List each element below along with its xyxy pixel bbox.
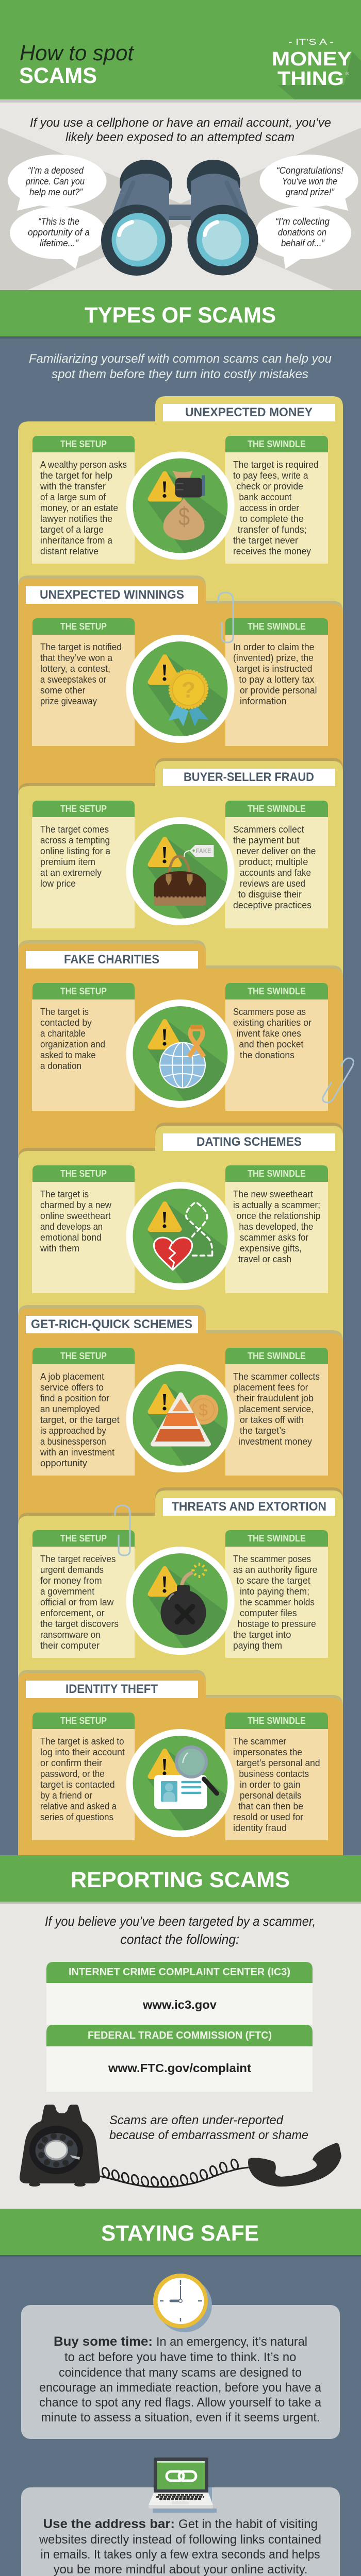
setup card: money, or an estate	[40, 503, 118, 513]
swindle card: placement fees for	[233, 1382, 308, 1393]
label: GET-RICH-QUICK SCHEMES	[31, 1317, 192, 1331]
types intro text: spot them before they turn into costly mistakes	[52, 367, 308, 381]
label: THREATS AND EXTORTION	[172, 1500, 326, 1514]
swindle card: Scammers collect	[233, 824, 304, 835]
setup card	[32, 801, 135, 928]
swindle card	[225, 801, 328, 928]
intro text: likely been exposed to an attempted scam	[65, 130, 294, 144]
swindle card: THE SWINDLE	[248, 1351, 306, 1361]
setup card	[32, 436, 135, 564]
setup card: THE SETUP	[60, 1716, 107, 1726]
reporting intro text: contact the following:	[121, 1931, 239, 1947]
swindle card: THE SWINDLE	[248, 1168, 306, 1179]
swindle card: In order to claim the	[233, 642, 315, 652]
swindle card: the scammer holds	[240, 1597, 315, 1607]
swindle card: (invented) prize, the	[233, 653, 314, 663]
swindle card	[225, 436, 328, 564]
setup card: with an investment	[40, 1447, 114, 1458]
swindle card	[225, 1348, 328, 1476]
heading banner: reporting scams	[0, 1855, 361, 1904]
setup card: opportunity	[40, 1458, 87, 1468]
icon: warning sign and fake handbag: FAKE	[196, 847, 211, 855]
setup card: relative and asked a	[40, 1801, 117, 1811]
setup card: or confirm their	[40, 1758, 102, 1768]
staying safe panel background	[0, 2255, 361, 2576]
icon: rotary phone	[20, 2105, 100, 2187]
logo: it's a money thing: MONEY	[272, 48, 352, 70]
setup card: across a tempting	[40, 835, 110, 845]
swindle card: the target into	[233, 1630, 291, 1640]
tip card: use the address bar	[21, 2458, 340, 2576]
label	[163, 404, 335, 421]
swindle card: information	[240, 696, 287, 706]
swindle card: is actually a scammer;	[233, 1200, 320, 1210]
setup card: an unemployed	[40, 1404, 100, 1414]
swindle card: travel or cash	[238, 1254, 291, 1264]
setup card: THE SETUP	[60, 986, 107, 996]
setup card: inheritance from a	[40, 535, 113, 546]
setup card: lawyer notifies the	[40, 514, 112, 524]
swindle card: access in order	[240, 503, 299, 513]
speech bubble: congratulations	[260, 155, 358, 211]
swindle card: placement service,	[239, 1404, 314, 1414]
label: UNEXPECTED MONEY	[185, 405, 313, 419]
setup card: log into their account	[40, 1747, 125, 1757]
speech bubble: donations: donations on	[278, 227, 326, 238]
swindle card: to pay a lottery tax	[239, 674, 314, 685]
setup card: the target for help	[40, 470, 112, 481]
logo: it's a money thing: - IT’S A -	[288, 37, 334, 47]
tip card: buy some time: coincidence that many scams are designed to	[59, 2366, 302, 2380]
swindle card: hostage to pressure	[238, 1619, 316, 1629]
swindle card: that can then be	[238, 1801, 303, 1811]
icon: warning sign and bomb	[126, 1547, 234, 1655]
contact card: FTC: FEDERAL TRADE COMMISSION (FTC)	[88, 2030, 272, 2041]
setup card: password, or the	[40, 1769, 105, 1779]
swindle card	[225, 618, 328, 746]
swindle card: bank account	[239, 492, 291, 502]
intro text: If you use a cellphone or have an email account, you’ve	[30, 116, 331, 130]
setup card	[32, 1165, 135, 1293]
swindle card: The target is required	[233, 460, 319, 470]
setup card: The target is notified	[40, 642, 122, 652]
setup card: series of questions	[40, 1812, 113, 1822]
label	[163, 769, 335, 786]
icon: clock	[153, 2274, 212, 2332]
setup card: THE SETUP	[60, 439, 107, 449]
paperclip 1	[218, 592, 233, 642]
swindle card: business contacts	[239, 1769, 309, 1779]
tip card: use the address bar: Get in the habit of visiting	[178, 2517, 318, 2531]
speech bubble: opportunity: “This is the	[38, 216, 79, 227]
tip card: buy some time: to act before you have time to think. It’s no	[64, 2350, 296, 2364]
setup card: of a large sum of	[40, 492, 106, 502]
label: IDENTITY THEFT	[65, 1682, 158, 1696]
setup card: asked to make	[40, 1050, 96, 1060]
setup card	[32, 983, 135, 1111]
icon: warning sign and fake handbag	[126, 817, 234, 925]
setup card: a government	[40, 1586, 94, 1597]
swindle card: THE SWINDLE	[248, 804, 306, 814]
setup card: and develops an	[40, 1222, 103, 1232]
swindle card: transfer of funds;	[238, 524, 307, 535]
label	[26, 1681, 198, 1698]
setup card: with the transfer	[40, 481, 106, 492]
folder: dating schemes	[18, 1123, 343, 1342]
setup card: The target is asked to	[40, 1736, 124, 1747]
swindle card: THE SWINDLE	[248, 986, 306, 996]
setup card: at an extremely	[40, 868, 102, 878]
speech bubble: deposed prince: help me out?”	[29, 187, 83, 197]
tip card: use the address bar: websites directly instead of following links contained	[39, 2533, 321, 2547]
speech bubble: deposed prince	[8, 155, 106, 211]
swindle card: THE SWINDLE	[248, 621, 306, 632]
setup card: emotional bond	[40, 1232, 102, 1243]
intro panel with binoculars	[0, 116, 361, 290]
setup card: THE SETUP	[60, 621, 107, 632]
setup card	[32, 1530, 135, 1658]
swindle card: target is instructed	[236, 664, 313, 674]
tip card: use the address bar: Use the address bar:	[43, 2517, 175, 2531]
setup card: enforcement, or	[40, 1608, 105, 1618]
swindle card	[225, 1713, 328, 1840]
tip card: use the address bar: in emails. It takes only a few extra seconds and helps	[41, 2548, 320, 2562]
setup card: a charitable	[40, 1028, 86, 1039]
setup card: The target receives	[40, 1554, 116, 1564]
setup card: THE SETUP	[60, 804, 107, 814]
swindle card: once the relationship	[236, 1211, 321, 1221]
label: DATING SCHEMES	[196, 1135, 302, 1149]
heading banner: types of scams: TYPES OF SCAMS	[85, 303, 276, 328]
setup card: charmed by a new	[40, 1200, 112, 1210]
folder: identity theft	[18, 1670, 343, 1855]
folder: fake charities	[18, 940, 343, 1160]
label: FAKE CHARITIES	[64, 953, 159, 967]
setup card: a donation	[40, 1061, 81, 1071]
setup card: ransomware on	[40, 1630, 100, 1640]
swindle card	[225, 1530, 328, 1658]
swindle card: the target’s	[240, 1426, 286, 1436]
setup card	[32, 618, 135, 746]
setup card: The target is	[40, 1007, 89, 1017]
title	[19, 41, 135, 88]
swindle card: personal details	[240, 1790, 302, 1801]
icon: phone cord	[100, 2159, 249, 2188]
icon: phone handset	[248, 2143, 341, 2187]
swindle card: Scammers pose as	[233, 1007, 306, 1017]
swindle card: investment money	[238, 1436, 312, 1447]
label	[163, 1133, 335, 1151]
tip card: buy some time: chance to spot any red flags. Allow yourself to take a	[39, 2396, 322, 2410]
setup card: premium item	[40, 857, 95, 867]
swindle card: THE SWINDLE	[248, 1716, 306, 1726]
setup card: service offers to	[40, 1382, 104, 1393]
setup card: THE SETUP	[60, 1351, 107, 1361]
swindle card: The scammer collects	[233, 1371, 320, 1382]
setup card: their computer	[40, 1640, 100, 1651]
setup card: target, or the target	[40, 1415, 120, 1425]
swindle card: reviews are used	[240, 878, 305, 889]
types intro text	[29, 352, 332, 381]
swindle card: The scammer poses	[233, 1554, 311, 1564]
types of scams panel background	[0, 336, 361, 1855]
icon: warning sign and prize seal: ?	[182, 677, 195, 703]
swindle card: product; multiple	[239, 857, 308, 867]
setup card	[32, 1713, 135, 1840]
under-reporting note: because of embarrassment or shame	[109, 2128, 308, 2142]
setup card: target is contacted	[40, 1780, 115, 1790]
swindle card: or takes off with	[240, 1415, 304, 1425]
contact card: IC3: www.ic3.gov	[142, 1998, 217, 2011]
types intro text: Familiarizing yourself with common scams can help you	[29, 352, 332, 366]
swindle card: in order to gain	[240, 1780, 300, 1790]
swindle card: has developed, the	[239, 1222, 313, 1232]
heading banner: reporting scams: REPORTING SCAMS	[71, 1868, 290, 1892]
swindle card: to scare the target	[236, 1575, 310, 1586]
swindle card: invent fake ones	[236, 1028, 301, 1039]
label	[26, 951, 198, 969]
folder: buyer-seller fraud	[18, 758, 343, 977]
icon: warning sign and prize seal	[126, 635, 234, 743]
setup card: a sweepstakes or	[40, 674, 106, 685]
swindle card: The new sweetheart	[233, 1189, 313, 1199]
setup card: find a position for	[40, 1393, 109, 1403]
tip card: buy some time: minute to assess a situation, even if it seems urgent.	[41, 2411, 320, 2425]
icon: warning sign, pyramid and coin	[126, 1364, 234, 1472]
heading banner: types of scams	[0, 290, 361, 338]
tip card: buy some time: In an emergency, it’s natural	[156, 2335, 307, 2349]
setup card: official or from law	[40, 1597, 114, 1607]
swindle card	[225, 983, 328, 1111]
swindle card: THE SWINDLE	[248, 1533, 306, 1544]
swindle card: resold or used for	[233, 1812, 303, 1822]
swindle card: receives the money	[233, 546, 311, 556]
setup card: low price	[40, 878, 76, 889]
setup card: A wealthy person asks	[40, 460, 127, 470]
swindle card: to disguise their	[238, 889, 302, 900]
header banner	[0, 0, 361, 103]
swindle card: accounts and fake	[240, 868, 311, 878]
icon: laptop	[149, 2458, 217, 2513]
speech bubble: opportunity: opportunity of a	[28, 227, 90, 238]
swindle card: the payment but	[233, 835, 300, 845]
intro text	[30, 116, 331, 144]
swindle card: or provide personal	[240, 685, 317, 696]
setup card: is approached by	[40, 1426, 106, 1436]
swindle card: the target never	[233, 535, 298, 546]
setup card: contacted by	[40, 1018, 92, 1028]
setup card: lottery, a contest,	[40, 664, 110, 674]
speech bubble: donations: “I’m collecting	[275, 216, 330, 227]
setup card: by a friend or	[40, 1790, 92, 1801]
heading banner: staying safe	[0, 2209, 361, 2257]
icon: warning sign, globe and ribbon	[126, 999, 234, 1108]
swindle card: to pay fees, write a	[233, 470, 308, 481]
setup card: The target is	[40, 1189, 89, 1199]
setup card	[32, 1348, 135, 1476]
folder: unexpected winnings	[18, 575, 343, 795]
setup card: The target comes	[40, 824, 109, 835]
setup card: for money from	[40, 1575, 102, 1586]
setup card: prize giveaway	[40, 696, 97, 706]
tip card: buy some time: encourage an immediate reaction, before you have a	[39, 2381, 322, 2395]
speech bubble: deposed prince: prince. Can you	[25, 176, 85, 187]
contact card: FTC: www.FTC.gov/complaint	[108, 2061, 251, 2075]
setup card: online listing for a	[40, 846, 111, 856]
swindle card: target’s personal and	[236, 1758, 320, 1768]
speech bubble: donations	[255, 207, 351, 269]
swindle card: expensive gifts,	[240, 1243, 302, 1253]
under-reporting note: Scams are often under-reported	[109, 2113, 284, 2127]
icon: warning sign and money bag: $	[178, 502, 190, 531]
tip card: buy some time: Buy some time:	[54, 2334, 153, 2349]
label: UNEXPECTED WINNINGS	[40, 588, 184, 602]
swindle card: check or provide	[236, 481, 303, 492]
swindle card: into paying them;	[240, 1586, 309, 1597]
swindle card: to complete the	[240, 514, 304, 524]
contact card: IC3	[46, 1962, 313, 2025]
icon: warning sign, pyramid and coin: $	[199, 1401, 208, 1419]
reporting intro text	[45, 1913, 316, 1947]
swindle card: identity fraud	[233, 1823, 287, 1833]
title: How to spot	[20, 41, 135, 65]
paperclip 3	[115, 1505, 130, 1555]
speech bubble: donations: behalf of...”	[281, 238, 325, 248]
swindle card: computer files	[240, 1608, 297, 1618]
under-reporting note	[109, 2113, 308, 2142]
swindle card: scammer asks for	[240, 1232, 308, 1243]
speech bubble: opportunity	[10, 207, 106, 269]
setup card: with them	[40, 1243, 79, 1253]
reporting intro text: If you believe you’ve been targeted by a scammer,	[45, 1913, 316, 1929]
swindle card: impersonates the	[233, 1747, 302, 1757]
setup card: target of a large	[40, 524, 104, 535]
swindle card: The scammer	[233, 1736, 286, 1747]
swindle card: their fraudulent job	[236, 1393, 314, 1403]
swindle card: paying them	[233, 1640, 282, 1651]
swindle card: and then pocket	[239, 1039, 303, 1049]
speech bubble: congratulations: You’ve won the	[282, 176, 337, 187]
icon: warning sign, id card and magnifier	[126, 1729, 234, 1837]
logo: it's a money thing: THING	[277, 68, 344, 90]
speech bubble: opportunity: lifetime...”	[40, 238, 79, 248]
title: SCAMS	[19, 63, 97, 88]
contact card: FTC	[46, 2025, 313, 2092]
setup card: some other	[40, 685, 86, 696]
folder: get-rich-quick schemes	[18, 1305, 343, 1524]
swindle card: THE SWINDLE	[248, 439, 306, 449]
logo: it's a money thing: ®	[346, 71, 349, 76]
setup card: THE SETUP	[60, 1168, 107, 1179]
folder: threats and extortion	[18, 1487, 343, 1707]
contact card: IC3: INTERNET CRIME COMPLAINT CENTER (IC3)	[69, 1967, 290, 1978]
swindle card: existing charities or	[233, 1018, 311, 1028]
label	[26, 586, 198, 604]
setup card: a businessperson	[40, 1436, 106, 1447]
icon: warning sign and money bag	[126, 451, 234, 560]
setup card: distant relative	[40, 546, 99, 556]
paperclip 2	[323, 1058, 353, 1103]
speech bubble: deposed prince: “I’m a deposed	[28, 165, 84, 176]
speech bubble: congratulations: “Congratulations!	[276, 165, 343, 176]
heading banner: staying safe: STAYING SAFE	[101, 2221, 259, 2246]
swindle card: never deliver on the	[236, 846, 316, 856]
icon: warning sign, dashed ribbon and broken heart	[126, 1182, 234, 1290]
swindle card: the donations	[240, 1050, 294, 1060]
setup card: THE SETUP	[60, 1533, 107, 1544]
logo: it's a money thing	[272, 37, 361, 99]
label: BUYER-SELLER FRAUD	[184, 770, 314, 784]
setup card: that they’ve won a	[40, 653, 113, 663]
setup card: A job placement	[40, 1371, 104, 1382]
setup card: online sweetheart	[40, 1211, 111, 1221]
setup card: the target discovers	[40, 1619, 119, 1629]
swindle card: deceptive practices	[233, 900, 311, 910]
icon: binoculars	[101, 160, 258, 276]
setup card: organization and	[40, 1039, 105, 1049]
swindle card: as an authority figure	[233, 1565, 317, 1575]
tip card: buy some time	[21, 2274, 340, 2439]
folder: unexpected money	[18, 396, 343, 613]
speech bubble: congratulations: grand prize!”	[286, 187, 335, 197]
setup card: urgent demands	[40, 1565, 104, 1575]
swindle card	[225, 1165, 328, 1293]
